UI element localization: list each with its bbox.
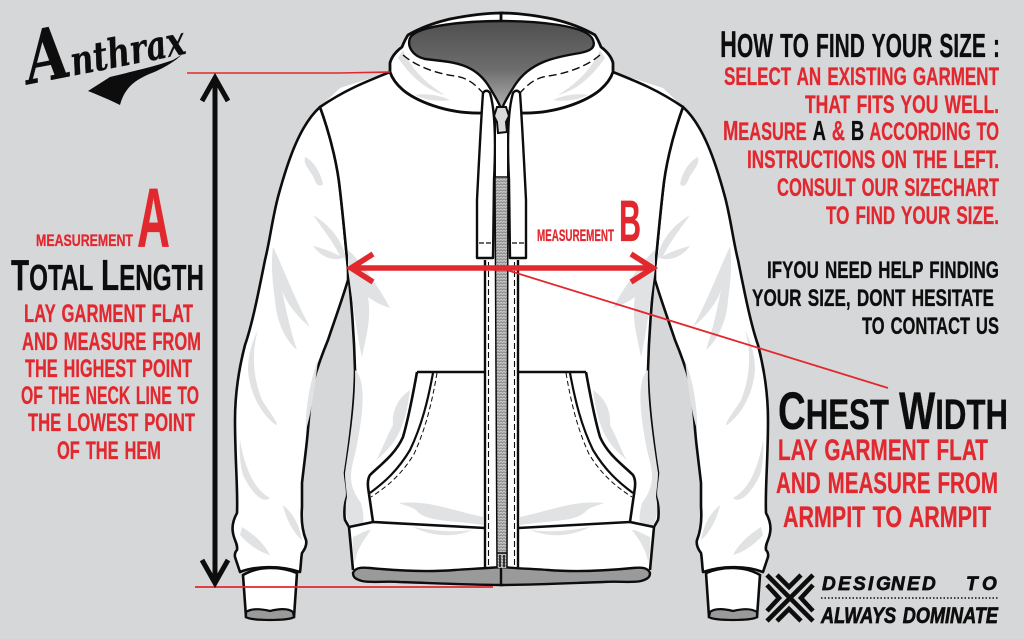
right half of hoodie (501, 13, 771, 620)
text block: measurement A instructions: AND MEASURE FROM (22, 328, 201, 356)
label: measurement B: MEASUREMENT (537, 226, 614, 245)
icon: crossed chevrons logo (767, 575, 813, 621)
logo swoosh (88, 50, 186, 105)
zipper pull (494, 107, 509, 133)
tagline: designed to always dominate: DESIGNED TO (822, 574, 997, 595)
red guide line: hem (195, 586, 493, 588)
hood opening (409, 21, 594, 110)
text block: how to find your size steps (723, 63, 999, 230)
dotted divider (821, 597, 998, 599)
zipper (494, 107, 509, 568)
hoodie illustration (232, 13, 771, 620)
text block: measurement A instructions: OF THE NECK LINE TO (21, 382, 199, 410)
logo: Anthrax: Anthrax (12, 0, 191, 102)
red guide line: top of neck (187, 72, 390, 73)
red leader line to chest width (500, 268, 888, 388)
tagline: designed to always dominate (820, 574, 999, 628)
label: measurement B (537, 189, 641, 254)
arrow: measurement A total length (202, 78, 228, 583)
label: measurement A: MEASUREMENT (36, 231, 133, 250)
text block: measurement A instructions: THE HIGHEST POINT (25, 355, 192, 383)
heading: total length: TOTAL LENGTH (11, 251, 204, 300)
heading block: measurement A: A (137, 171, 170, 265)
label: measurement B: B (619, 189, 641, 254)
text block: chest width instructions (776, 434, 998, 534)
text block: measurement A instructions: THE LOWEST POINT (28, 409, 195, 437)
left half of hoodie (232, 13, 502, 620)
text block: measurement A instructions: LAY GARMENT FLAT (24, 300, 193, 328)
heading block: measurement A (36, 171, 170, 265)
text block: measurement A instructions (21, 300, 201, 465)
text block: contact help (752, 257, 999, 340)
arrow: measurement B chest width (351, 254, 653, 282)
text block: measurement A instructions: OF THE HEM (57, 437, 161, 465)
